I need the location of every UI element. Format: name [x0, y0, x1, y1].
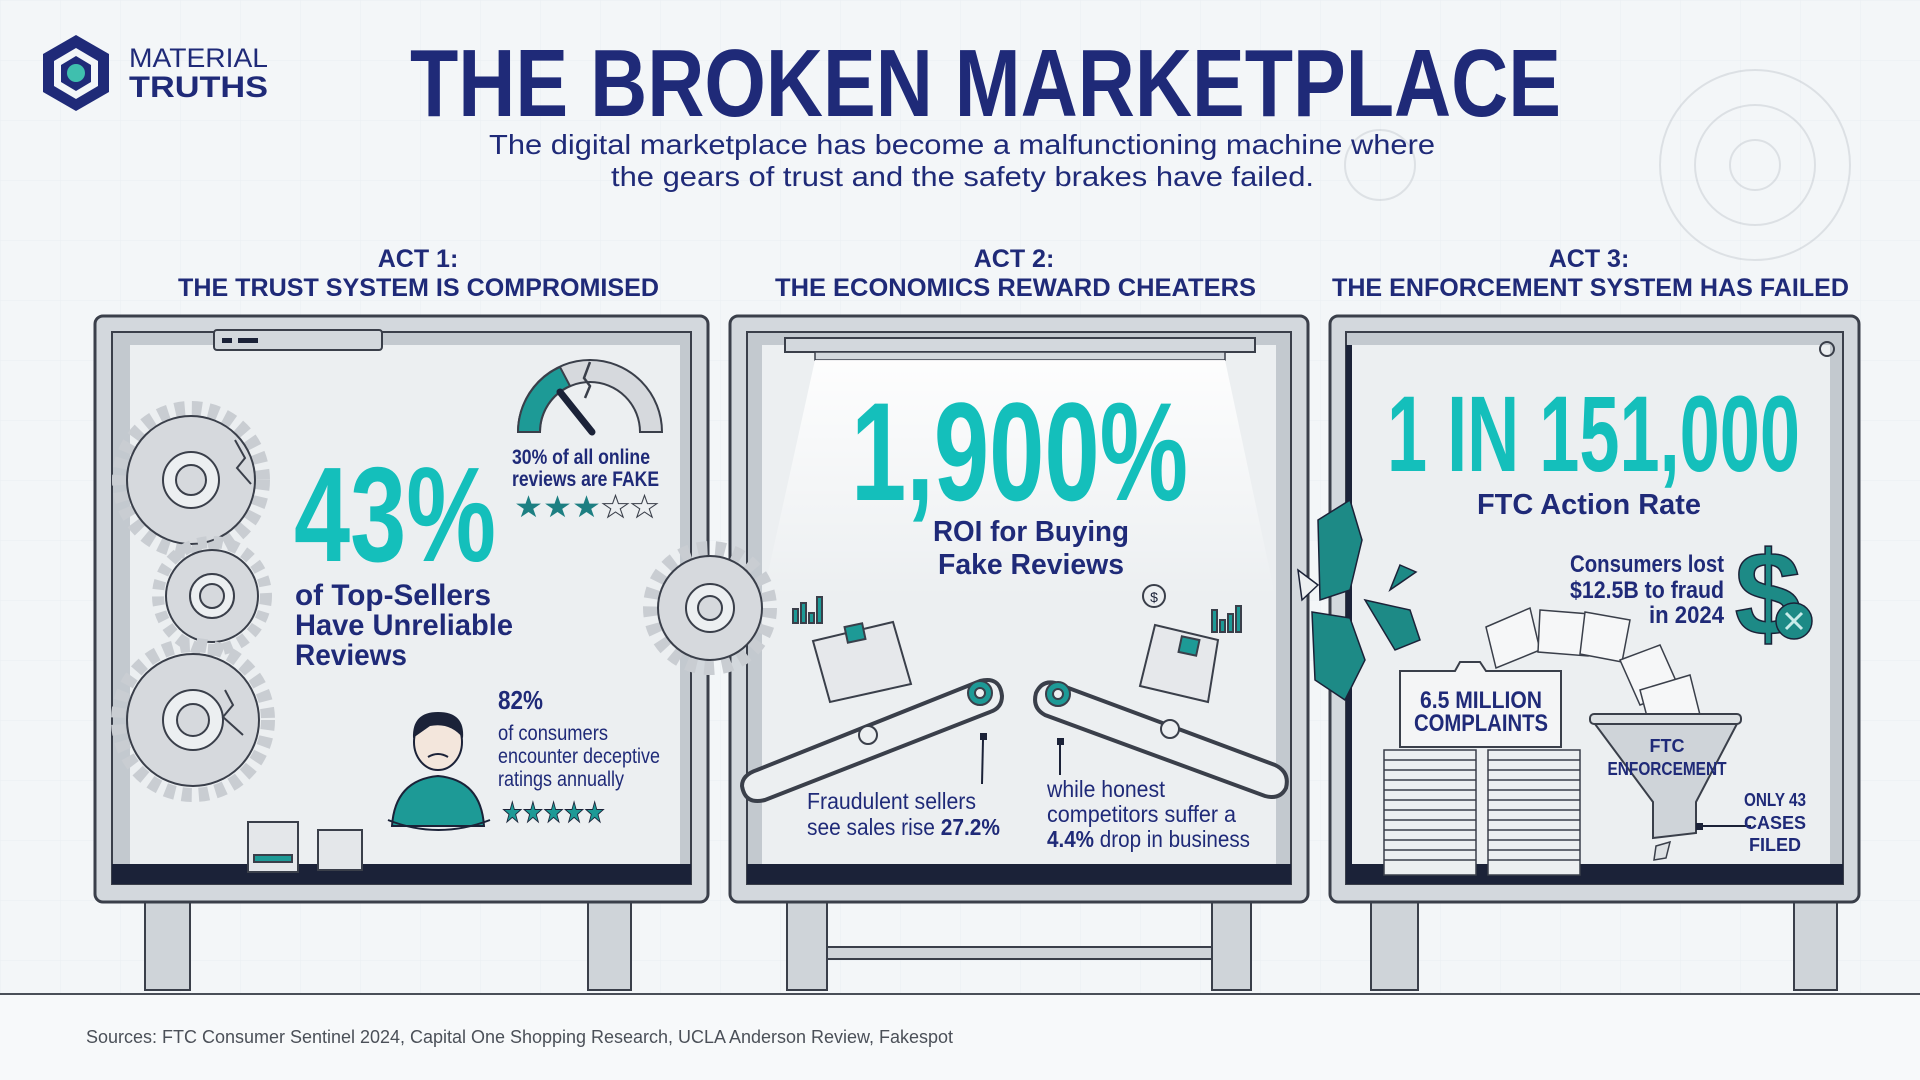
- label: 6.5 million complaints: [1400, 662, 1561, 747]
- sources: Sources: FTC Consumer Sentinel 2024, Capital One Shopping Research, UCLA Anderson Review, Fakespot: [86, 1027, 953, 1047]
- stat: 1,900%: ROI for Buying: [933, 516, 1129, 548]
- icon: broken gears: [118, 408, 268, 795]
- act 2 heading: [775, 245, 1256, 302]
- act 1 heading: THE TRUST SYSTEM IS COMPROMISED: [178, 274, 659, 302]
- icon: boxes: [248, 822, 362, 872]
- callout: honest competitors: while honest: [1046, 776, 1166, 802]
- text: 82%: ratings annually: [498, 768, 624, 791]
- icon: shattered glass: [1298, 500, 1420, 700]
- text: 82%: 82%: [498, 685, 543, 715]
- stat: 43%: [294, 439, 513, 672]
- icon: left conveyor rising: [742, 597, 1002, 801]
- act 2 heading: ACT 2:: [974, 245, 1054, 273]
- stat: 1,900%: 1,900%: [851, 373, 1188, 530]
- stat: 1 in 151,000: FTC Action Rate: [1477, 489, 1701, 521]
- act 2 heading: THE ECONOMICS REWARD CHEATERS: [775, 274, 1256, 302]
- text: 30% fake: reviews are FAKE: [512, 468, 659, 491]
- label: 6.5 million complaints: 6.5 MILLION: [1420, 687, 1542, 714]
- callout: only 43 cases: ONLY 43: [1744, 790, 1806, 810]
- icon: flying papers: [1486, 608, 1700, 728]
- callout: only 43 cases: [1696, 790, 1806, 855]
- text: consumers lost: in 2024: [1649, 602, 1725, 629]
- stat: 1,900%: Fake Reviews: [938, 549, 1124, 581]
- subtitle: [489, 129, 1435, 192]
- icon: connecting gear: [650, 548, 770, 668]
- callout: fraudulent sellers: [807, 733, 1000, 840]
- text: 82%: encounter deceptive: [498, 745, 660, 768]
- label: 6.5 million complaints: COMPLAINTS: [1414, 710, 1548, 737]
- icon: complaint stacks: [1384, 750, 1580, 875]
- icon: sad person: [388, 712, 490, 830]
- callout: only 43 cases: CASES: [1744, 813, 1806, 833]
- callout: honest competitors: 4.4% drop in business: [1047, 826, 1250, 852]
- stat: 43%: 43%: [294, 439, 496, 590]
- text: consumers lost: Consumers lost: [1570, 551, 1724, 578]
- logo: TRUTHS: [129, 71, 268, 104]
- text: 82%: ★★★★★: [502, 797, 605, 828]
- text: 82%: [498, 685, 660, 828]
- stat: 43%: of Top-Sellers: [295, 579, 491, 612]
- text: 82%: of consumers: [498, 722, 608, 745]
- icon: FTC funnel: FTC: [1650, 736, 1684, 756]
- icon: FTC funnel: [1590, 714, 1741, 860]
- text: 30% fake: [512, 446, 659, 524]
- text: consumers lost: $12.5B to fraud: [1570, 577, 1724, 604]
- icon: right conveyor falling: $: [1150, 589, 1158, 605]
- callout: fraudulent sellers: Fraudulent sellers: [807, 788, 976, 814]
- stat: 1,900%: [851, 373, 1188, 581]
- act 1 heading: ACT 1:: [378, 245, 458, 273]
- stat: 1 in 151,000: [1387, 373, 1800, 521]
- panel 1: trust: [95, 316, 708, 902]
- callout: honest competitors: [1046, 738, 1250, 852]
- act 1 heading: [178, 245, 659, 302]
- act 3 heading: [1332, 245, 1849, 302]
- text: 30% fake: ★★★★★: [514, 491, 659, 524]
- panel 3: enforcement: [1298, 316, 1859, 902]
- subtitle: The digital marketplace has become a malfunctioning machine where: [489, 129, 1435, 160]
- act 3 heading: ACT 3:: [1549, 245, 1629, 273]
- icon: right conveyor falling: [1035, 585, 1287, 797]
- icon: dollar with x: $: [1735, 527, 1801, 661]
- legs: [145, 900, 1837, 990]
- text: consumers lost: [1570, 551, 1725, 629]
- icon: FTC funnel: ENFORCEMENT: [1608, 759, 1727, 779]
- panel 2: economics: [730, 316, 1308, 902]
- callout: only 43 cases: FILED: [1749, 835, 1801, 855]
- text: 30% fake: 30% of all online: [512, 446, 650, 469]
- subtitle: the gears of trust and the safety brakes have failed.: [611, 161, 1314, 192]
- icon: broken gauge: [518, 360, 662, 432]
- act 3 heading: THE ENFORCEMENT SYSTEM HAS FAILED: [1332, 274, 1849, 302]
- stat: 43%: Reviews: [295, 639, 407, 672]
- callout: honest competitors: competitors suffer a: [1047, 801, 1236, 827]
- stat: 43%: Have Unreliable: [295, 609, 513, 642]
- callout: fraudulent sellers: see sales rise 27.2%: [807, 814, 1000, 840]
- title: THE BROKEN MARKETPLACE: [410, 30, 1561, 137]
- logo: MATERIAL: [129, 43, 268, 73]
- logo: [43, 35, 268, 111]
